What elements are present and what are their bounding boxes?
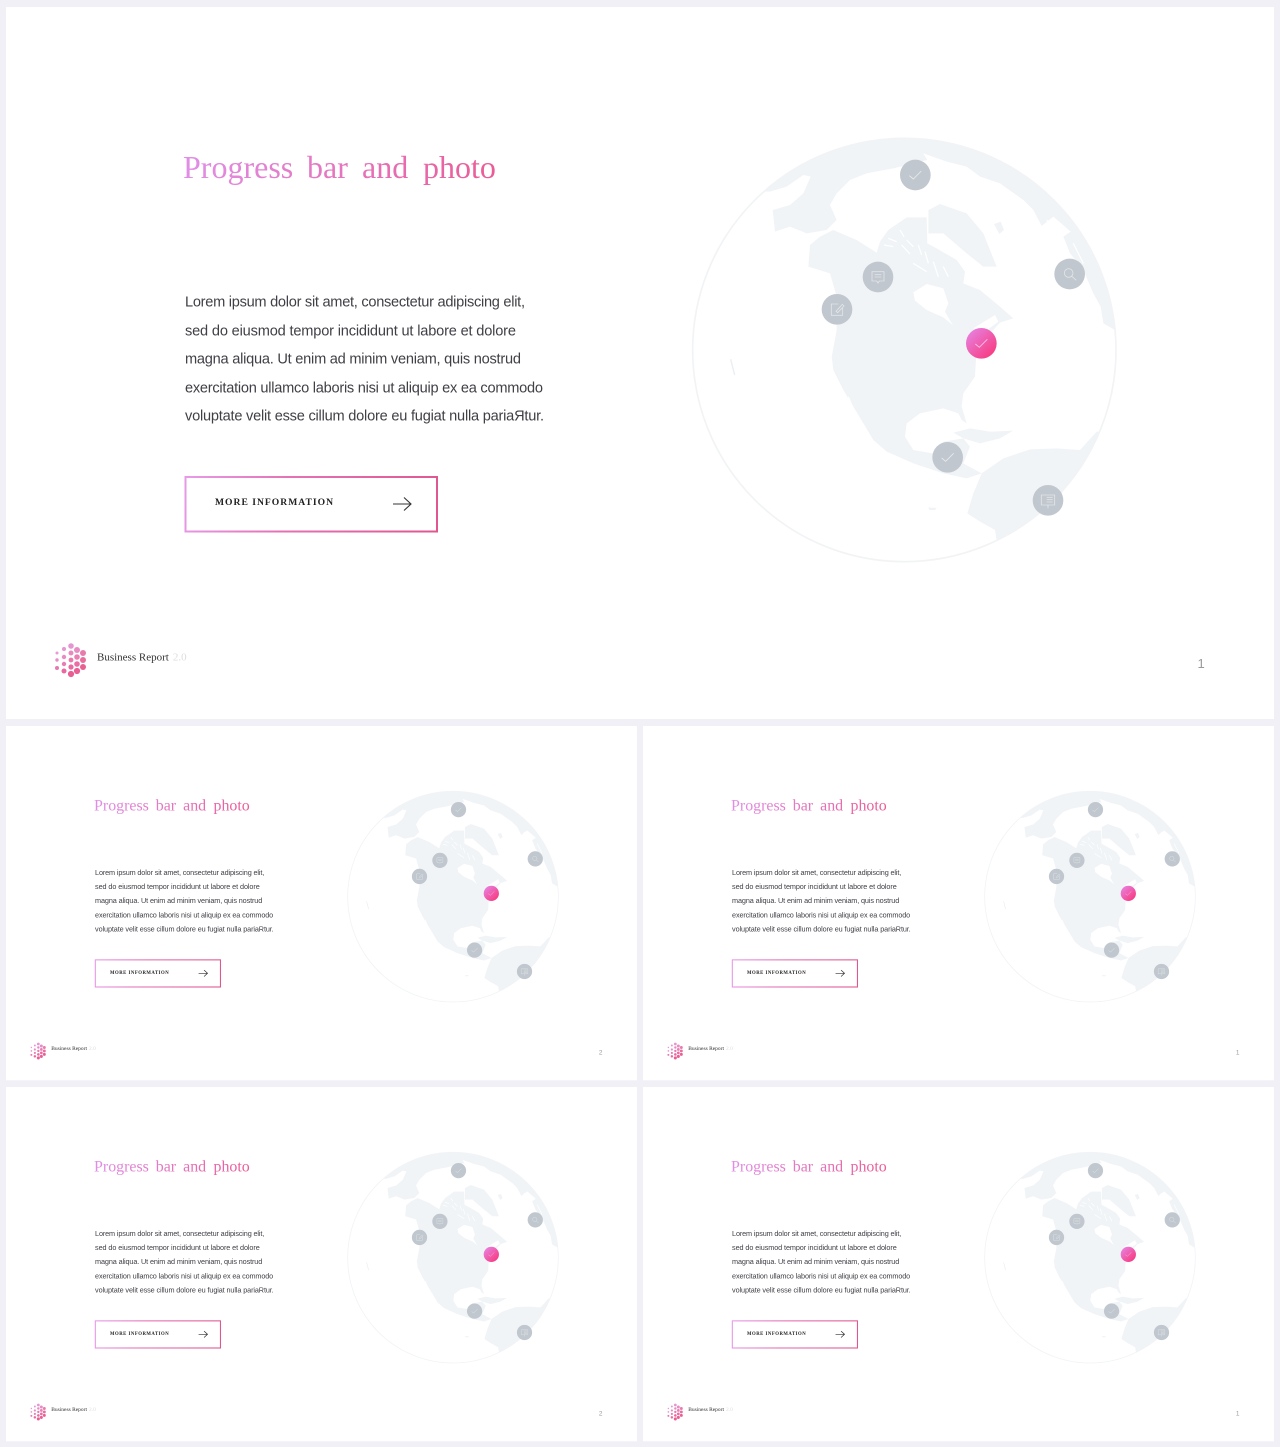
body text: voluptate velit esse cillum dolore eu fugiat nulla pariaRtur. (732, 1286, 911, 1295)
title: photo (213, 798, 250, 815)
marker: chat (432, 1214, 448, 1229)
marker: board (1154, 1325, 1169, 1340)
panel: slide thumbnail top left (6, 726, 637, 1080)
marker: note (822, 294, 852, 325)
page number: 2 (599, 1410, 603, 1417)
globe map (348, 791, 560, 1003)
marker: chat (1069, 1214, 1085, 1229)
marker: note (412, 869, 427, 884)
panel: slide thumbnail bottom left (6, 1087, 637, 1441)
body text (732, 868, 911, 934)
body text: sed do eiusmod tempor incididunt ut labore et dolore (732, 882, 897, 891)
marker: check south (1104, 942, 1119, 958)
marker: search (528, 1212, 543, 1227)
button: more information: MORE INFORMATION (215, 497, 333, 508)
body text: magna aliqua. Ut enim ad minim veniam, quis nostrud (732, 1257, 899, 1266)
marker: highlighted check (1121, 1247, 1136, 1262)
button: more information (186, 477, 437, 532)
logo (667, 1043, 683, 1059)
marker: check top (1088, 1163, 1103, 1178)
title: and (820, 798, 843, 815)
marker: search (1165, 1212, 1180, 1227)
page number: 2 (599, 1049, 603, 1056)
title: and (820, 1159, 843, 1176)
marker: highlighted check (1121, 886, 1136, 901)
logo (30, 1404, 46, 1420)
marker: search (528, 851, 543, 866)
marker: search (1054, 259, 1085, 289)
body text: exercitation ullamco laboris nisi ut aliquip ex ea commodo (732, 911, 910, 920)
marker: board (517, 964, 532, 979)
body text: exercitation ullamco laboris nisi ut aliquip ex ea commodo (95, 1272, 273, 1281)
globe map (348, 1152, 560, 1364)
brand name: Business Report 2.0 (97, 652, 187, 664)
panel: slide thumbnail top right (643, 726, 1274, 1080)
globe map (985, 1152, 1197, 1364)
logo (55, 643, 86, 677)
title: bar (156, 1159, 177, 1176)
logo (30, 1043, 46, 1059)
marker: board (1033, 485, 1063, 516)
marker: check top (1088, 802, 1103, 817)
marker: note (1049, 1230, 1064, 1245)
body text: voluptate velit esse cillum dolore eu fugiat nulla pariaRtur. (732, 925, 911, 934)
title: Progress (731, 1159, 786, 1176)
title: photo (850, 798, 887, 815)
button: more information (95, 1321, 220, 1348)
marker: highlighted check (484, 1247, 499, 1262)
marker: chat (432, 853, 448, 868)
marker: check top (451, 1163, 466, 1178)
icon: arrow (199, 970, 208, 977)
icon: arrow (393, 498, 411, 510)
title: and (362, 149, 408, 185)
panel: main slide (6, 7, 1274, 719)
body text: exercitation ullamco laboris nisi ut aliquip ex ea commodo (732, 1272, 910, 1281)
marker: check top (900, 160, 931, 190)
marker: chat (863, 262, 893, 292)
body text: Lorem ipsum dolor sit amet, consectetur adipiscing elit, (95, 868, 264, 877)
marker: check south (1104, 1303, 1119, 1319)
title: photo (850, 1159, 887, 1176)
body text: Lorem ipsum dolor sit amet, consectetur adipiscing elit, (732, 1229, 901, 1238)
title: and (183, 798, 206, 815)
button: more information: MORE INFORMATION (747, 971, 806, 976)
icon: arrow (199, 1331, 208, 1338)
title: bar (156, 798, 177, 815)
page number: 1 (1236, 1410, 1240, 1417)
body text: exercitation ullamco laboris nisi ut aliquip ex ea commodo (95, 911, 273, 920)
body text (732, 1229, 911, 1295)
marker: board (1154, 964, 1169, 979)
icon: arrow (836, 970, 845, 977)
title: bar (307, 149, 348, 185)
body text (185, 294, 544, 424)
marker: check top (451, 802, 466, 817)
marker: highlighted check (966, 328, 997, 359)
body text: sed do eiusmod tempor incididunt ut labore et dolore (95, 1243, 260, 1252)
globe map (693, 138, 1120, 563)
globe map (985, 791, 1197, 1003)
body text: sed do eiusmod tempor incididunt ut labore et dolore (95, 882, 260, 891)
marker: highlighted check (484, 886, 499, 901)
marker: note (1049, 869, 1064, 884)
page number: 1 (1198, 656, 1205, 671)
title: photo (213, 1159, 250, 1176)
title: Progress (731, 798, 786, 815)
body text (95, 868, 274, 934)
marker: check south (467, 1303, 482, 1319)
brand name: Business Report2.0 (51, 1046, 96, 1052)
marker: board (517, 1325, 532, 1340)
brand name: Business Report2.0 (51, 1407, 96, 1413)
panel: slide thumbnail bottom right (643, 1087, 1274, 1441)
title: bar (793, 1159, 814, 1176)
body text: voluptate velit esse cillum dolore eu fugiat nulla pariaЯtur. (185, 408, 544, 424)
body text: magna aliqua. Ut enim ad minim veniam, quis nostrud (185, 352, 521, 368)
body text: Lorem ipsum dolor sit amet, consectetur adipiscing elit, (732, 868, 901, 877)
body text (95, 1229, 274, 1295)
title: bar (793, 798, 814, 815)
icon: arrow (836, 1331, 845, 1338)
body text: sed do eiusmod tempor incididunt ut labore et dolore (732, 1243, 897, 1252)
marker: check south (932, 442, 963, 473)
title: and (183, 1159, 206, 1176)
body text: voluptate velit esse cillum dolore eu fugiat nulla pariaRtur. (95, 925, 274, 934)
brand name: Business Report2.0 (688, 1046, 733, 1052)
button: more information: MORE INFORMATION (110, 1332, 169, 1337)
body text: exercitation ullamco laboris nisi ut aliquip ex ea commodo (185, 380, 543, 396)
brand name: Business Report2.0 (688, 1407, 733, 1413)
marker: chat (1069, 853, 1085, 868)
button: more information: MORE INFORMATION (747, 1332, 806, 1337)
logo (667, 1404, 683, 1420)
marker: note (412, 1230, 427, 1245)
body text: voluptate velit esse cillum dolore eu fugiat nulla pariaRtur. (95, 1286, 274, 1295)
body text: Lorem ipsum dolor sit amet, consectetur adipiscing elit, (95, 1229, 264, 1238)
title: Progress (94, 798, 149, 815)
button: more information (732, 960, 857, 987)
body text: Lorem ipsum dolor sit amet, consectetur adipiscing elit, (185, 294, 525, 310)
marker: check south (467, 942, 482, 958)
body text: magna aliqua. Ut enim ad minim veniam, quis nostrud (95, 896, 262, 905)
title: photo (423, 149, 496, 185)
marker: search (1165, 851, 1180, 866)
button: more information (732, 1321, 857, 1348)
button: more information (95, 960, 220, 987)
body text: sed do eiusmod tempor incididunt ut labore et dolore (185, 324, 516, 340)
title: Progress (94, 1159, 149, 1176)
button: more information: MORE INFORMATION (110, 971, 169, 976)
body text: magna aliqua. Ut enim ad minim veniam, quis nostrud (95, 1257, 262, 1266)
title: Progress (183, 149, 293, 185)
page number: 1 (1236, 1049, 1240, 1056)
body text: magna aliqua. Ut enim ad minim veniam, quis nostrud (732, 896, 899, 905)
